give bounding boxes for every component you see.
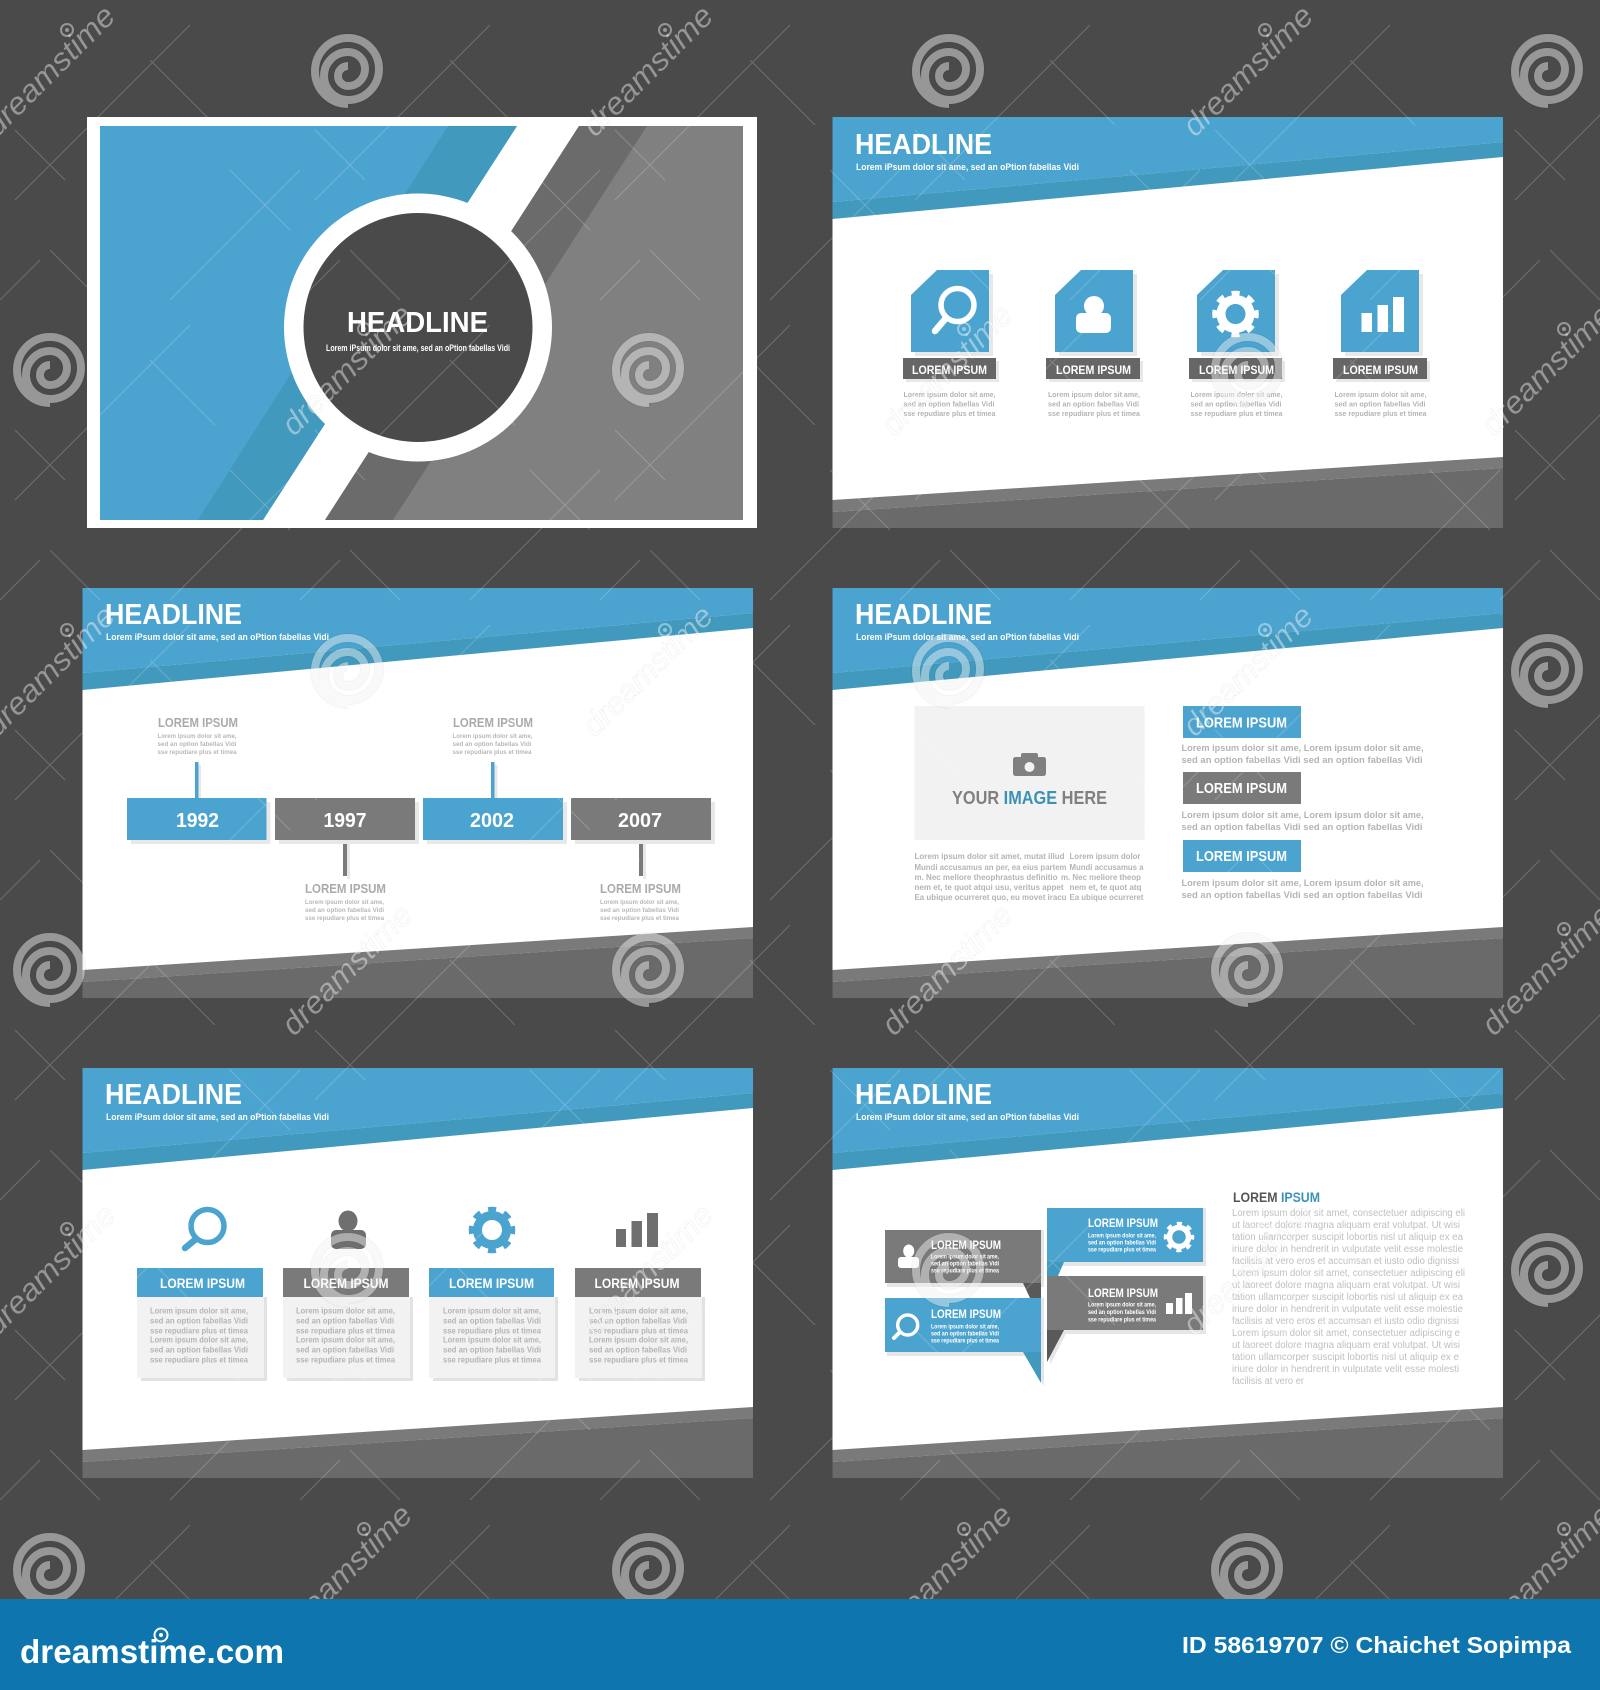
icon card: gear: sse repudiare plus et timea <box>1190 409 1283 418</box>
icon card: person <box>1046 270 1143 418</box>
icon card: search: sse repudiare plus et timea <box>904 409 996 418</box>
column 2: person: LOREM IPSUM <box>304 1276 388 1291</box>
column 2: person: Lorem ipsum dolor sit ame, <box>296 1306 395 1316</box>
watermark: dreamstime wordmarks: dreamstime <box>575 598 720 743</box>
callout: search <box>885 1298 1044 1386</box>
slide background <box>832 117 1503 528</box>
text paragraph: facilisis at vero eros et accumsan et iusto odio dignissi <box>1232 1256 1459 1267</box>
subtitle: Lorem iPsum dolor sit ame, sed an oPtion fabellas Vidi <box>856 1112 1079 1122</box>
text columns: Lorem ipsum dolor <box>1070 852 1140 861</box>
callout: bar chart: sse repudiare plus et timea <box>1088 1318 1157 1324</box>
text paragraph: Lorem ipsum dolor sit amet, consectetuer adipiscing e <box>1232 1328 1460 1339</box>
column 3: gear <box>429 1210 558 1381</box>
slide background <box>832 1068 1503 1478</box>
text paragraph: facilisis at vero er <box>1232 1376 1305 1387</box>
text paragraph: ut laoreet dolore magna aliquam erat volutpat. Ut wisi <box>1232 1340 1460 1351</box>
slide background <box>832 588 1503 998</box>
image caption: YOUR IMAGE HERE <box>952 788 1107 808</box>
timeline item: 2007: 2007 <box>618 810 662 832</box>
headline: HEADLINE <box>855 1079 992 1111</box>
column 3: gear: sse repudiare plus et timea <box>443 1326 542 1336</box>
item 2 <box>1182 772 1424 832</box>
icon card: search <box>903 270 999 418</box>
column 3: gear: sed an option fabellas Vidi <box>443 1316 541 1326</box>
timeline item: 1992 <box>127 716 270 844</box>
icon card: gear: sed an option fabellas Vidi <box>1190 400 1282 408</box>
callout: search: sse repudiare plus et timea <box>931 1338 1000 1344</box>
timeline item: 1992: Lorem ipsum dolor sit ame, <box>158 733 237 740</box>
callout: search: sed an option fabellas Vidi <box>931 1332 999 1338</box>
watermark: dreamstime wordmarks: dreamstime <box>1175 0 1320 143</box>
item 3: LOREM IPSUM <box>1196 849 1287 865</box>
callout: bar chart <box>1047 1276 1206 1365</box>
icon card: person: sed an option fabellas Vidi <box>1048 400 1139 408</box>
callout: person: sse repudiare plus et timea <box>931 1268 1000 1274</box>
callout: gear: LOREM IPSUM <box>1088 1218 1158 1230</box>
icon card: person: Lorem ipsum dolor sit ame, <box>1048 390 1140 399</box>
column 1: search: Lorem ipsum dolor sit ame, <box>150 1306 248 1316</box>
text columns: Ea ubique ocurreret quo, eu movet iracu <box>914 893 1067 902</box>
watermark: dreamstime wordmarks: dreamstime <box>874 297 1019 442</box>
watermark: dreamstime wordmarks: dreamstime <box>575 0 720 143</box>
timeline item: 2007: sse repudiare plus et timea <box>600 915 679 922</box>
text paragraph: tation ullamcorper suscipit lobortis nisl ut aliquip ex ea <box>1232 1292 1463 1303</box>
timeline item: 1997: 1997 <box>324 810 366 832</box>
timeline item: 1992: sse repudiare plus et timea <box>158 749 237 756</box>
icon card: gear <box>1189 270 1285 418</box>
headline: HEADLINE <box>105 1079 242 1111</box>
column 3: gear: Lorem ipsum dolor sit ame, <box>443 1306 541 1316</box>
icon card: gear: LOREM IPSUM <box>1199 363 1274 377</box>
item 1: LOREM IPSUM <box>1196 716 1287 732</box>
column 2: person: sed an option fabellas Vidi <box>296 1346 394 1354</box>
panel: icon columns slide <box>82 1068 753 1478</box>
central circle <box>284 194 552 462</box>
timeline item: 1997: sse repudiare plus et timea <box>305 915 384 922</box>
callout: bar chart: sed an option fabellas Vidi <box>1088 1310 1156 1316</box>
column 3: gear: sed an option fabellas Vidi <box>443 1346 541 1354</box>
watermark: dreamstime wordmarks: dreamstime <box>1175 1197 1320 1342</box>
icon card: bar chart: sse repudiare plus et timea <box>1334 409 1427 418</box>
callout: search: Lorem ipsum dolor sit ame, <box>931 1324 999 1330</box>
item 2: Lorem ipsum dolor sit ame, Lorem ipsum dolor sit ame, <box>1182 810 1424 820</box>
watermark: dreamstime wordmarks: dreamstime <box>274 297 419 442</box>
column 1: search: sse repudiare plus et timea <box>150 1356 249 1364</box>
timeline item: 2007: Lorem ipsum dolor sit ame, <box>600 899 679 906</box>
text columns: nem et, te quot atqui usu, veritus appet <box>914 883 1064 892</box>
timeline item: 2007: LOREM IPSUM <box>600 882 681 896</box>
callout: gear: sse repudiare plus et timea <box>1088 1248 1157 1254</box>
column 2: person: sse repudiare plus et timea <box>296 1326 396 1336</box>
callout: person: sed an option fabellas Vidi <box>931 1262 999 1268</box>
timeline item: 2007 <box>571 798 715 922</box>
text paragraph: facilisis at vero eros et accumsan et iusto odio dignissi <box>1232 1316 1459 1327</box>
column 4: bar chart <box>575 1213 705 1381</box>
text heading: LOREM IPSUM <box>1233 1190 1320 1205</box>
timeline item: 1992: LOREM IPSUM <box>158 716 238 730</box>
subtitle: Lorem iPsum dolor sit ame, sed an oPtion fabellas Vidi <box>326 343 510 353</box>
icon card: bar chart: Lorem ipsum dolor sit ame, <box>1334 390 1426 399</box>
column 1: search: LOREM IPSUM <box>160 1276 245 1291</box>
text paragraph: tation ullamcorper suscipit lobortis nisl ut aliquip ex ea <box>1232 1232 1463 1243</box>
column 3: gear: Lorem ipsum dolor sit ame, <box>443 1336 541 1344</box>
column 1: search: sed an option fabellas Vidi <box>150 1316 248 1326</box>
text paragraph: iriure dolor in hendrerit in vulputate velit esse molestie <box>1232 1304 1463 1315</box>
timeline item: 2002 <box>423 716 567 844</box>
panel: four icons slide <box>832 117 1503 528</box>
image credit: ID 58619707 © Chaichet Sopimpa <box>1182 1632 1571 1658</box>
timeline item: 1997: sed an option fabellas Vidi <box>305 907 384 914</box>
timeline item: 2002: 2002 <box>470 810 514 832</box>
panel: speech bubbles slide <box>832 1068 1503 1478</box>
text columns: m. Nec meliore theop <box>1061 873 1141 882</box>
text paragraph <box>1232 1208 1465 1387</box>
headline: HEADLINE <box>347 307 488 339</box>
subtitle: Lorem iPsum dolor sit ame, sed an oPtion fabellas Vidi <box>856 632 1079 642</box>
icon card: bar chart: sed an option fabellas Vidi <box>1334 400 1426 408</box>
item 3: sed an option fabellas Vidi sed an option fabellas Vidi <box>1182 890 1422 900</box>
callout: search: LOREM IPSUM <box>931 1309 1001 1321</box>
timeline item: 1997 <box>275 798 419 922</box>
column 3: gear: sse repudiare plus et timea <box>443 1356 542 1364</box>
icon card: gear: Lorem ipsum dolor sit ame, <box>1190 390 1282 399</box>
column 1: search: Lorem ipsum dolor sit ame, <box>150 1336 248 1344</box>
column 1: search <box>137 1210 267 1381</box>
text paragraph: Lorem ipsum dolor sit amet, consectetuer adipiscing eli <box>1232 1208 1465 1219</box>
column 3: gear: LOREM IPSUM <box>449 1276 534 1291</box>
subtitle: Lorem iPsum dolor sit ame, sed an oPtion fabellas Vidi <box>106 1112 329 1122</box>
timeline item: 1992: sed an option fabellas Vidi <box>158 741 237 748</box>
watermark: dreamstime wordmarks: dreamstime <box>274 897 419 1042</box>
timeline item: 2002: Lorem ipsum dolor sit ame, <box>452 733 533 740</box>
text paragraph: iriure dolor in hendrerit in vulputate velit esse molesti <box>1232 1364 1459 1375</box>
timeline item: 1997: LOREM IPSUM <box>305 882 386 896</box>
column 4: bar chart: sed an option fabellas Vidi <box>589 1346 687 1354</box>
item 1: Lorem ipsum dolor sit ame, Lorem ipsum dolor sit ame, <box>1182 743 1424 753</box>
column 1: search: sse repudiare plus et timea <box>150 1326 249 1336</box>
item 3 <box>1182 840 1424 900</box>
timeline item: 2002: sed an option fabellas Vidi <box>452 741 532 748</box>
headline: HEADLINE <box>855 599 992 631</box>
column 2: person <box>283 1210 413 1381</box>
timeline item: 2007: sed an option fabellas Vidi <box>600 907 679 914</box>
watermark: dreamstime wordmarks: dreamstime <box>575 1197 720 1342</box>
icon card: search: sed an option fabellas Vidi <box>904 400 994 408</box>
item 1: sed an option fabellas Vidi sed an option fabellas Vidi <box>1182 755 1422 765</box>
icon card: person: sse repudiare plus et timea <box>1048 409 1141 418</box>
panel: image and text slide <box>832 588 1503 998</box>
text columns: nem et, te quot atq <box>1070 883 1142 892</box>
item 3: Lorem ipsum dolor sit ame, Lorem ipsum dolor sit ame, <box>1182 878 1424 888</box>
text paragraph: ut laoreet dolore magna aliquam erat volutpat. Ut wisi <box>1232 1220 1460 1231</box>
callout: gear: sed an option fabellas Vidi <box>1088 1240 1156 1246</box>
icon card: search: LOREM IPSUM <box>912 363 987 377</box>
footer logo: dreamstime.com <box>20 1633 284 1670</box>
panel: title slide <box>87 117 757 528</box>
slide background <box>82 1068 753 1478</box>
callout: gear: Lorem ipsum dolor sit ame, <box>1088 1234 1156 1240</box>
item 2: sed an option fabellas Vidi sed an option fabellas Vidi <box>1182 822 1422 832</box>
headline: HEADLINE <box>855 129 992 161</box>
icon: camera <box>1013 753 1046 776</box>
icon card: bar chart <box>1333 270 1430 418</box>
watermark: dreamstime wordmarks: dreamstime <box>874 897 1019 1042</box>
callout: bar chart: Lorem ipsum dolor sit ame, <box>1088 1302 1156 1308</box>
column 2: person: Lorem ipsum dolor sit ame, <box>296 1336 395 1344</box>
icon card: bar chart: LOREM IPSUM <box>1343 363 1418 377</box>
item 2: LOREM IPSUM <box>1196 781 1287 797</box>
watermark: dreamstime wordmarks: dreamstime <box>1175 598 1320 743</box>
slide frame <box>87 117 757 528</box>
callout: bar chart: LOREM IPSUM <box>1088 1288 1158 1300</box>
item 1 <box>1182 706 1424 765</box>
text paragraph: tation ullamcorper suscipit lobortis nisl ut aliquip ex e <box>1232 1352 1459 1363</box>
column 2: person: sse repudiare plus et timea <box>296 1356 396 1364</box>
column 4: bar chart: sse repudiare plus et timea <box>589 1326 689 1336</box>
watermark: dreamstime wordmarks: dreamstime <box>874 1497 1019 1642</box>
callout: person: Lorem ipsum dolor sit ame, <box>931 1254 999 1260</box>
text columns: Lorem ipsum dolor sit amet, mutat illud <box>914 852 1065 861</box>
callout: gear <box>1047 1208 1206 1276</box>
timeline item: 1992: 1992 <box>176 810 219 832</box>
text columns: m. Nec meliore theophrastus definitio <box>914 873 1058 882</box>
gray section <box>325 126 743 520</box>
footer bar <box>0 1599 1600 1690</box>
column 4: bar chart: sse repudiare plus et timea <box>589 1356 689 1364</box>
column 2: person: sed an option fabellas Vidi <box>296 1316 394 1326</box>
callout: person: LOREM IPSUM <box>931 1240 1001 1252</box>
text columns: Ea ubique ocurreret <box>1070 893 1144 902</box>
callout: person <box>885 1230 1044 1298</box>
icon card: search: Lorem ipsum dolor sit ame, <box>904 390 996 399</box>
text columns: Mundi accusamus a <box>1070 863 1144 872</box>
column 4: bar chart: Lorem ipsum dolor sit ame, <box>589 1336 688 1344</box>
text columns: Mundi accusamus an per, ea eius partem <box>914 863 1067 872</box>
subtitle: Lorem iPsum dolor sit ame, sed an oPtion fabellas Vidi <box>856 162 1079 172</box>
image placeholder <box>914 706 1144 840</box>
timeline item: 1997: Lorem ipsum dolor sit ame, <box>305 899 384 906</box>
icon card: person: LOREM IPSUM <box>1056 363 1131 377</box>
column 1: search: sed an option fabellas Vidi <box>150 1346 248 1354</box>
text paragraph: iriure dolor in hendrerit in vulputate velit esse molestie <box>1232 1244 1463 1255</box>
column 4: bar chart: Lorem ipsum dolor sit ame, <box>589 1306 688 1316</box>
panel: timeline slide <box>82 588 753 998</box>
timeline item: 2002: sse repudiare plus et timea <box>452 749 532 756</box>
blue section <box>100 126 517 520</box>
watermark: dreamstime wordmarks: dreamstime <box>274 1497 419 1642</box>
slide background <box>82 588 753 998</box>
timeline item: 2002: LOREM IPSUM <box>453 716 533 730</box>
headline: HEADLINE <box>105 599 242 631</box>
column 4: bar chart: sed an option fabellas Vidi <box>589 1316 687 1326</box>
text paragraph: ut laoreet dolore magna aliquam erat volutpat. Ut wisi <box>1232 1280 1460 1291</box>
text paragraph: Lorem ipsum dolor sit amet, consectetuer adipiscing eli <box>1232 1268 1465 1279</box>
column 4: bar chart: LOREM IPSUM <box>594 1276 680 1291</box>
text columns <box>914 852 1144 902</box>
subtitle: Lorem iPsum dolor sit ame, sed an oPtion fabellas Vidi <box>106 632 329 642</box>
